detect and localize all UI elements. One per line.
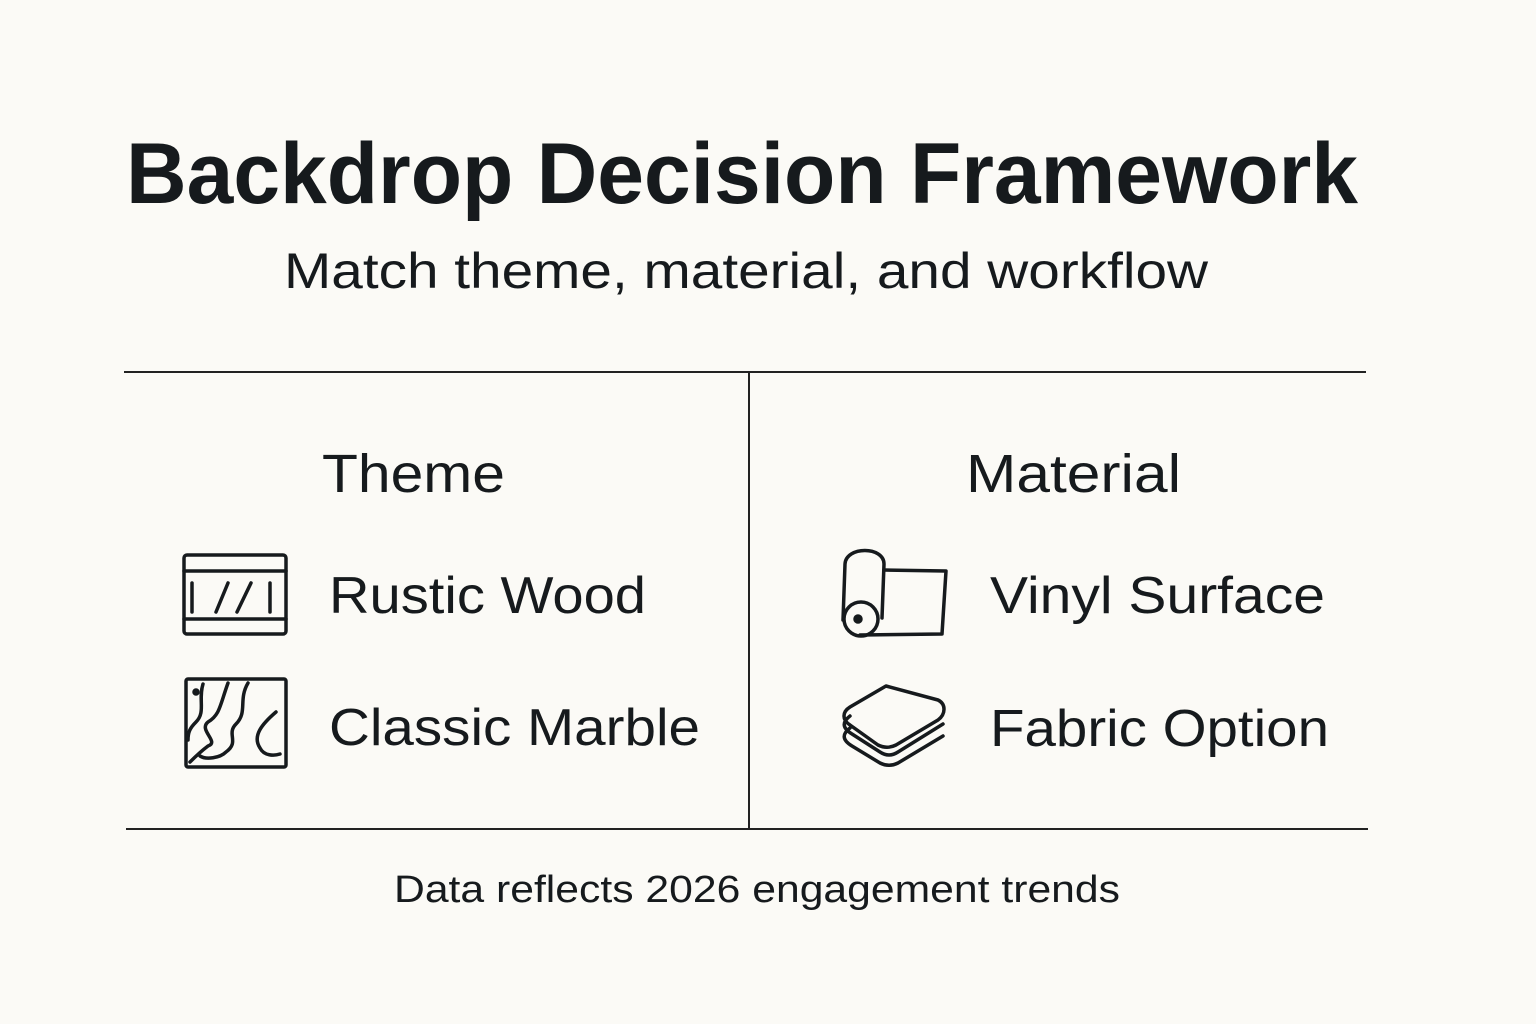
icon: classic marble xyxy=(186,679,286,767)
icon: fabric stack xyxy=(844,686,944,765)
title: Backdrop Decision Framework xyxy=(126,126,1358,222)
label: Vinyl Surface: Vinyl Surface xyxy=(990,567,1325,625)
panel: theme xyxy=(184,444,700,767)
heading: Material: Material xyxy=(966,444,1181,504)
label: Fabric Option: Fabric Option xyxy=(990,700,1329,758)
heading: Theme: Theme xyxy=(322,444,505,504)
panel: material xyxy=(843,444,1329,765)
icon: rustic wood xyxy=(184,555,286,634)
footer note: Data reflects 2026 engagement trends xyxy=(394,869,1120,911)
label: Rustic Wood: Rustic Wood xyxy=(329,567,646,625)
label: Classic Marble: Classic Marble xyxy=(329,699,700,757)
icon: vinyl roll xyxy=(843,550,946,636)
subtitle: Match theme, material, and workflow xyxy=(284,243,1209,299)
